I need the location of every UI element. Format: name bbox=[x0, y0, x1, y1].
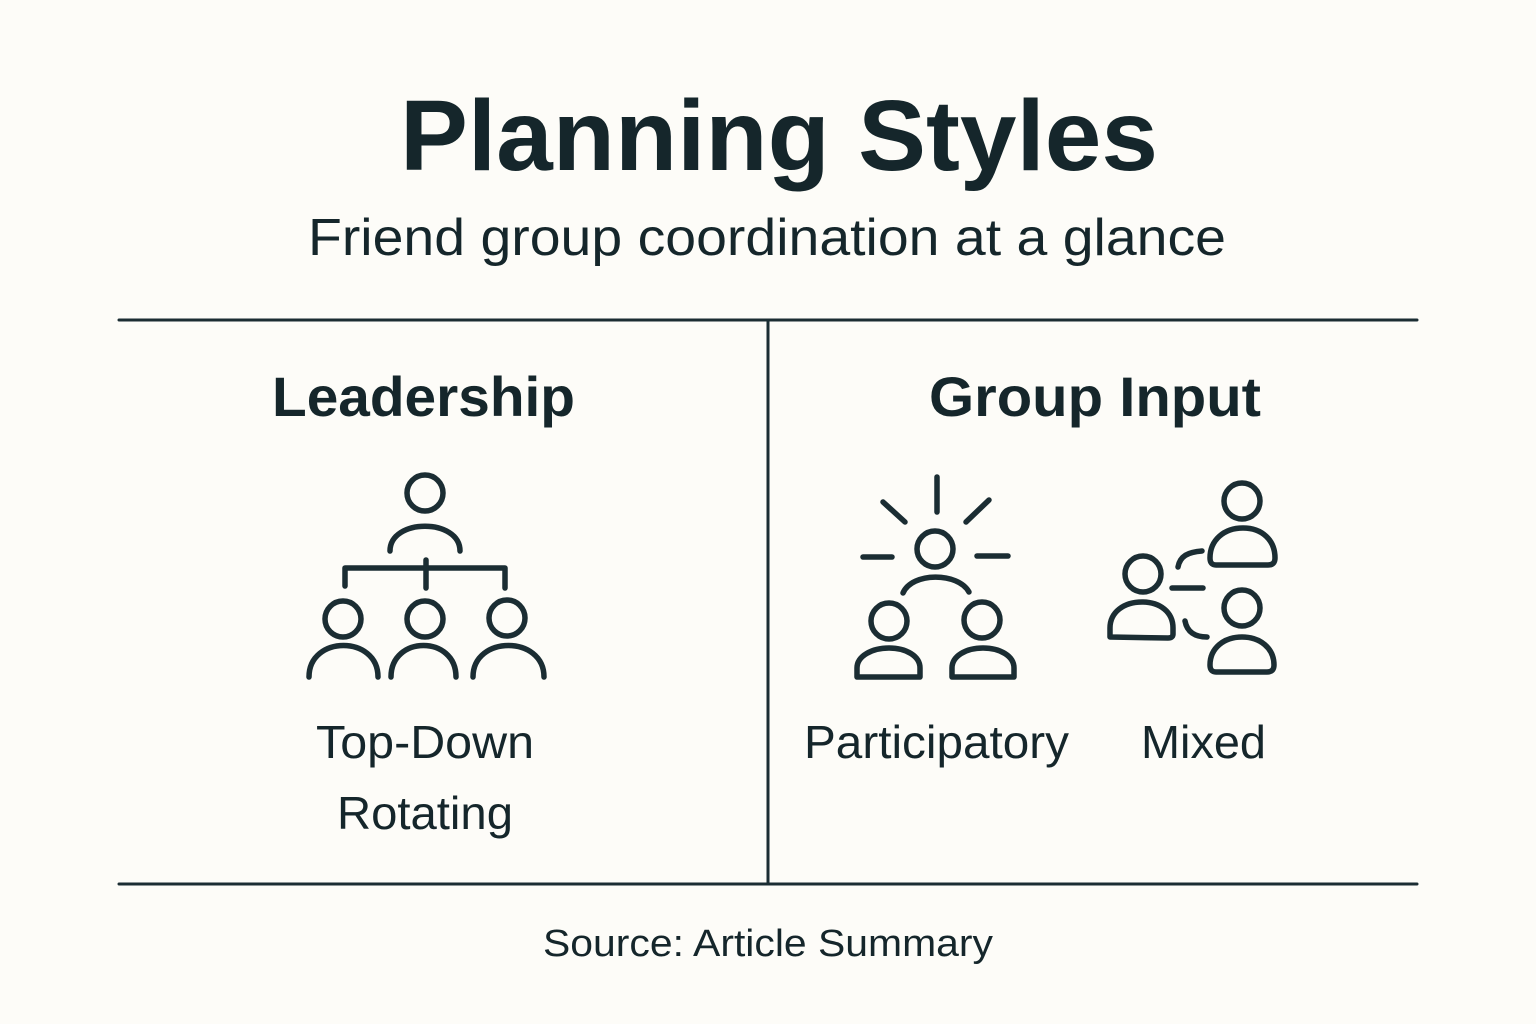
title: Planning Styles bbox=[400, 80, 1158, 192]
icon: top-down hierarchy bbox=[309, 475, 544, 677]
label: participatory: Participatory bbox=[804, 716, 1069, 768]
panel: group input bbox=[804, 365, 1275, 768]
label: mixed: Mixed bbox=[1141, 716, 1266, 768]
heading: leadership: Leadership bbox=[272, 365, 575, 428]
comparison table frame bbox=[119, 320, 1417, 884]
heading: group input: Group Input bbox=[929, 365, 1261, 428]
panel: leadership bbox=[272, 365, 575, 839]
label: top-down: Top-Down bbox=[316, 716, 534, 768]
label: rotating: Rotating bbox=[337, 787, 513, 839]
source note: Source: Article Summary bbox=[543, 923, 993, 965]
icon: participatory group bbox=[857, 477, 1014, 677]
icon: mixed group bbox=[1110, 483, 1275, 672]
subtitle: Friend group coordination at a glance bbox=[308, 209, 1226, 267]
